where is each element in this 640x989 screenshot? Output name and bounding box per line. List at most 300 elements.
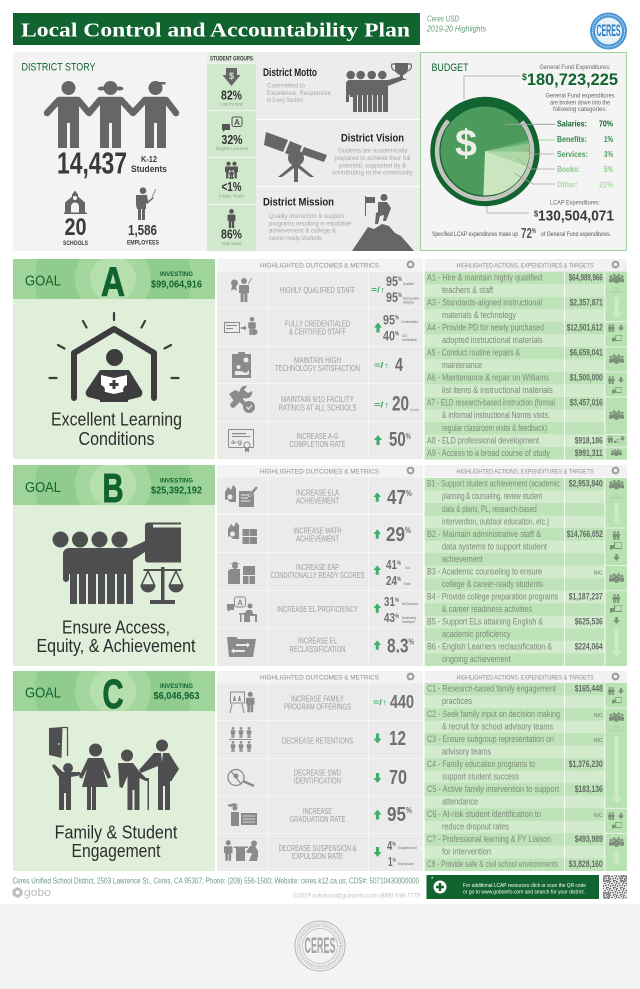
panel: district motto <box>256 52 420 119</box>
students count: 14,437 <box>57 146 127 180</box>
QR code <box>603 875 627 899</box>
target student icons A <box>608 274 625 456</box>
goal A header: A <box>101 259 125 305</box>
metric: EAP conditionally ready scores: % <box>397 561 401 567</box>
metric: fully credentialed staff: % <box>395 332 400 338</box>
mission text <box>269 213 351 242</box>
metric: fully credentialed staff: & CERTIFIED STAFF <box>289 326 346 336</box>
target student icons B <box>609 480 624 656</box>
heading: district mission: District Mission <box>263 196 334 208</box>
title banner: Local Control and Accountability Plan <box>21 20 410 42</box>
donut chart: general fund expenditures <box>430 97 540 206</box>
expenditures C <box>569 684 603 869</box>
leader lines <box>464 76 555 213</box>
panel: goal A outcomes and metrics <box>217 259 423 459</box>
action list C: reduce dropout rates <box>442 822 509 832</box>
budget intro text: General Fund expenditures <box>546 92 615 100</box>
action list C: C7 - Professional learning & FY Liaison <box>427 834 551 844</box>
action list A: adopted instructional materials <box>442 335 543 345</box>
action list C: C1 - Research-based family engagement <box>427 684 556 694</box>
action list A: A5 - Conduct routine repairs & <box>427 348 520 358</box>
metric: EL proficiency: 31 <box>384 594 398 609</box>
target student icons B: Students <box>610 496 624 500</box>
vision text: potential, supported by & <box>339 162 407 169</box>
metric: EL reclassification: INCREASE EL <box>298 636 337 646</box>
metric: suspension and expulsion rate <box>224 838 417 869</box>
metric: math achievement: 29 <box>386 524 408 546</box>
motto text <box>267 82 331 104</box>
motto text: to Every Student <box>267 97 303 104</box>
LCAP expenditures total: LCAP Expenditures: <box>550 200 600 206</box>
metric: EL reclassification: % <box>408 638 414 647</box>
metric: highly qualified staff: % <box>398 293 403 299</box>
metric: EAP conditionally ready scores <box>228 557 411 588</box>
employees count: 1,586 <box>128 222 157 239</box>
metric: suspension and expulsion rate: % <box>393 858 396 864</box>
metric: suspension and expulsion rate: Expulsion <box>398 862 414 866</box>
schools count: SCHOOLS <box>63 241 88 247</box>
metric: family program offerings: 440 <box>390 692 414 712</box>
expenditures C: N/C <box>594 813 603 819</box>
action list C: C2 - Seek family input on decision making <box>427 709 560 719</box>
icon: reader under house roof <box>50 313 178 402</box>
metric: highly qualified staff: HIGHLY QUALIFIED STAFF <box>280 285 355 295</box>
group: foster youth: <1% <box>222 180 242 194</box>
heading: student groups: STUDENT GROUPS <box>210 56 253 62</box>
metric: fully credentialed staff: FULLY CREDENTIALED <box>285 318 350 328</box>
legend: budget categories <box>557 118 613 190</box>
metric: highly qualified staff: Qualified <box>403 282 414 286</box>
bottom seal: CERES <box>304 934 336 958</box>
action list B: B6 - English Learners reclassification & <box>427 642 552 652</box>
target student icons A: Students <box>610 290 624 294</box>
district and year: Ceres USD <box>427 14 459 24</box>
action list C: advisory teams <box>442 746 491 756</box>
employees count: EMPLOYEES <box>127 240 159 246</box>
metric: EL proficiency: Well Developed <box>402 602 418 606</box>
callout: additional LCAP resources: For additional LCAP resources click or scan the QR code <box>463 883 586 889</box>
metric: fully credentialed staff: ECDS <box>402 334 407 338</box>
action list C <box>427 684 560 869</box>
heading: budget: BUDGET <box>432 62 469 74</box>
goal B header: GOAL <box>25 479 61 496</box>
group: english learners: English Learners <box>216 146 249 151</box>
icon: gear <box>613 468 618 473</box>
metric: EAP conditionally ready scores: Math <box>404 582 411 586</box>
motto text: Committed to <box>267 82 305 90</box>
expenditures B: $1,187,237 <box>569 592 603 602</box>
metric: ELA achievement: 47 <box>387 487 409 509</box>
group: english learners: 32% <box>222 133 242 147</box>
metric: graduation rate: GRADUATION RATE <box>290 814 346 824</box>
LCAP expenditures total <box>534 200 614 224</box>
goal C header: INVESTING <box>160 683 193 690</box>
metric: graduation rate: INCREASE <box>303 806 332 816</box>
panel: goal B outcomes and metrics <box>217 465 423 666</box>
group: foster youth <box>219 162 244 198</box>
LCAP share sentence: 72 <box>521 225 538 242</box>
schools count <box>63 214 88 247</box>
action list B: ongoing achievement <box>442 654 511 664</box>
expenditures A: $918,186 <box>575 435 603 445</box>
icon: students with book and scales <box>50 522 184 604</box>
legend: budget categories: Salaries: <box>557 118 587 128</box>
action list A: A8 - ELD professional development <box>427 435 539 445</box>
metric: family program offerings: PROGRAM OFFERINGS <box>284 702 351 712</box>
metric: fully credentialed staff: 95 <box>383 312 399 328</box>
metric: facility ratings: =/↑ <box>374 400 389 410</box>
donut chart: general fund expenditures: $ <box>455 123 477 165</box>
metric: family program offerings: INCREASE FAMILY <box>291 694 344 704</box>
metric: EL proficiency: Moderately <box>402 616 416 620</box>
budget intro text: following categories: <box>553 106 607 113</box>
LCAP expenditures total: 130,504,071 <box>538 208 614 224</box>
metric: math achievement <box>228 522 411 546</box>
icon: teacher <box>136 187 156 220</box>
action list B <box>427 479 560 664</box>
panel: goal C actions and expenditures <box>425 671 627 871</box>
expenditures B: $2,953,840 <box>569 479 603 489</box>
metric: facility ratings: Schools <box>410 408 419 412</box>
icon: gear <box>408 262 413 267</box>
metric: EAP conditionally ready scores: CONDITIONALLY READY SCORES <box>270 570 365 580</box>
metric: decrease SWD identification: DECREASE SWD <box>294 768 341 778</box>
vision text: Students are academically <box>338 148 408 154</box>
heading: district motto: District Motto <box>263 67 317 79</box>
goal B header: B <box>102 465 124 511</box>
action list B: & career readiness activities <box>442 604 532 614</box>
metric: suspension and expulsion rate: 1 <box>388 854 395 869</box>
expenditures C: $493,989 <box>575 834 603 844</box>
goal C title <box>55 822 177 861</box>
LCAP share sentence: % <box>532 228 537 235</box>
action list B: B1 - Support student achievement (academic <box>427 479 560 489</box>
metric: EL reclassification <box>227 636 414 658</box>
panel: district vision <box>256 120 420 186</box>
panel: goal B actions and expenditures <box>425 465 627 666</box>
group: high need <box>221 209 242 246</box>
metric: facility ratings: RATINGS AT ALL SCHOOLS <box>278 402 357 412</box>
expenditures A: $991,311 <box>575 448 603 458</box>
goal B header: INVESTING <box>160 478 193 484</box>
panel: goal B <box>13 407 215 666</box>
icon: family at open door <box>49 727 179 810</box>
goal A title: Conditions <box>78 428 154 449</box>
panel: district story <box>13 52 207 251</box>
action list A: A6 - Maintenance & repair on Williams <box>427 373 549 383</box>
metric: ELA achievement: INCREASE ELA <box>296 488 339 498</box>
expenditures B: $625,536 <box>575 616 603 626</box>
action list A: A4 - Provide PD for newly purchased <box>427 322 544 332</box>
leader lines over chart <box>505 124 555 184</box>
metric: EL proficiency <box>227 594 418 625</box>
metric: A-G completion rate <box>228 429 411 452</box>
metric: EAP conditionally ready scores: INCREASE EAP <box>296 562 339 572</box>
action list B: intervention, outdoor education, etc.) <box>442 516 549 526</box>
metric: EAP conditionally ready scores: ELA <box>405 566 411 570</box>
action list C: C6 - At-risk student identification to <box>427 809 541 819</box>
metric: A-G completion rate: 50 <box>389 429 411 451</box>
action list B: data systems to support student <box>442 541 547 551</box>
metric: graduation rate <box>227 803 412 826</box>
title banner <box>13 13 420 45</box>
icon: climber on mountain with flag <box>352 194 414 251</box>
goal A header: GOAL <box>25 273 61 290</box>
metric: suspension and expulsion rate: Suspension <box>398 846 417 850</box>
metric: graduation rate: 95 <box>387 804 409 826</box>
students count: Students <box>131 164 167 174</box>
expenditures B: N/C <box>594 570 603 576</box>
metric: family program offerings <box>230 692 414 713</box>
action list C: C4 - Family education programs to <box>427 759 535 769</box>
expenditures A: $64,989,966 <box>569 272 603 282</box>
metric: technology satisfaction: MAINTAIN HIGH <box>294 355 341 365</box>
panel: goal C outcomes and metrics <box>217 671 423 871</box>
expenditures A: $6,659,041 <box>570 348 603 358</box>
metric: fully credentialed staff: Certification <box>402 338 417 342</box>
action list A: maintenance <box>442 360 482 370</box>
metric: highly qualified staff: Assigned <box>403 300 414 304</box>
metric: graduation rate: % <box>406 806 412 815</box>
action list C: support student success <box>442 771 519 781</box>
budget intro text: are broken down into the <box>550 99 610 106</box>
icon: people raising trophy <box>342 63 411 112</box>
action list C: C3 - Ensure subgroup representation on <box>427 734 554 744</box>
metric: technology satisfaction: 4 <box>395 355 403 375</box>
expenditures A <box>567 272 603 458</box>
goal A header: INVESTING <box>160 271 193 278</box>
heading: district story: DISTRICT STORY <box>22 62 96 74</box>
action list A: A7 - ELD research-based instruction (formal <box>427 398 555 408</box>
action list A: materials & technology <box>442 310 516 320</box>
metric: A-G completion rate: COMPLETION RATE <box>290 439 346 449</box>
group: english learners <box>216 117 249 151</box>
expenditures A: $3,457,016 <box>570 398 603 408</box>
expenditures C: $3,828,160 <box>569 859 603 869</box>
LCAP share sentence <box>432 225 611 242</box>
group: foster youth: Foster Youth <box>219 194 244 198</box>
metric: highly qualified staff: 95 <box>386 273 402 289</box>
goal B header: $25,392,192 <box>151 485 202 497</box>
heading: district vision: District Vision <box>341 132 404 144</box>
district and year <box>426 14 486 34</box>
metric: decrease SWD identification: 70 <box>389 767 407 789</box>
metric: technology satisfaction: TECHNOLOGY SATISFACTION <box>275 363 360 373</box>
target student icons C: Students <box>610 728 624 732</box>
icon: Ceres district seal <box>590 12 627 50</box>
callout: additional LCAP resources: or go to www.goboinfo.com and search for your district. <box>463 890 585 896</box>
legend: budget categories: Services: <box>557 149 588 159</box>
metric: fully credentialed staff: 40 <box>383 328 399 344</box>
icon: school <box>64 190 87 214</box>
action list C: practices <box>442 696 472 706</box>
icon: gear <box>408 674 413 679</box>
group: low income: 82% <box>221 88 242 102</box>
metric: math achievement: % <box>405 526 411 535</box>
goal B title: Ensure Access, <box>62 617 170 638</box>
expenditures C: N/C <box>594 713 603 719</box>
expenditures A: $12,501,612 <box>567 322 603 332</box>
expenditures A: $2,357,871 <box>570 298 603 308</box>
action list A: regular classroom visits & feedback) <box>442 423 547 433</box>
metric: EL proficiency: % <box>395 598 399 604</box>
goal A title: Excellent Learning <box>51 409 182 430</box>
panel: goal C <box>13 613 215 871</box>
action list A <box>427 272 555 458</box>
callout: additional LCAP resources: * <box>431 877 434 883</box>
goal A title <box>51 409 182 449</box>
action list B: B3 - Academic counseling to ensure <box>427 566 542 576</box>
action list A: teachers & staff <box>442 285 493 295</box>
students count: K-12 <box>141 154 157 164</box>
legend: budget categories: Benefits: <box>557 134 587 144</box>
page background: bottom band <box>0 904 640 989</box>
target student icons B: All <box>615 492 619 496</box>
vision text <box>332 148 414 177</box>
legend: budget categories: Books: <box>557 164 580 174</box>
heading: actions and expenditures: HIGHLIGHTED ACTIONS, EXPENDITURES & TARGETS <box>456 468 594 476</box>
panel: district mission <box>256 187 420 251</box>
metric: EL reclassification: RECLASSIFICATION <box>290 644 346 654</box>
metric: facility ratings: 20 <box>392 392 409 416</box>
heading: actions and expenditures: HIGHLIGHTED ACTIONS, EXPENDITURES & TARGETS <box>456 262 594 269</box>
action list C: C5 - Active family intervention to support <box>427 784 559 794</box>
metric: technology satisfaction <box>232 352 403 378</box>
expenditures B: $14,766,052 <box>567 529 603 539</box>
action list C: attendance <box>442 796 478 806</box>
icon: gear <box>613 674 618 679</box>
metric: suspension and expulsion rate: DECREASE SUSPENSION & <box>278 843 357 853</box>
general fund total: General Fund Expenditures: <box>540 64 611 71</box>
metric: EL proficiency: Developed <box>402 620 415 624</box>
goal B header <box>13 407 215 563</box>
action list C: & recruit for school advisory teams <box>442 721 553 731</box>
vision text: contributing to the community <box>332 170 414 177</box>
expenditures C: $1,376,230 <box>569 759 603 769</box>
expenditures C: N/C <box>594 738 603 744</box>
employees count <box>127 222 159 246</box>
metric: decrease SWD identification: IDENTIFICATION <box>294 776 341 786</box>
metric: family program offerings: =/↑ <box>373 698 387 707</box>
metric: ELA achievement: % <box>406 489 412 498</box>
icon: gear <box>408 468 413 473</box>
icon: three students holding hands <box>47 81 176 148</box>
metric: EAP conditionally ready scores: % <box>397 577 401 583</box>
metric: EL proficiency: A <box>237 598 243 608</box>
goal C title: Family & Student <box>55 822 177 843</box>
metric: decrease SWD identification <box>228 767 407 789</box>
metric: A-G completion rate: a-g <box>231 440 242 446</box>
metric: EL reclassification: 8.3 <box>387 636 415 658</box>
metric: highly qualified staff: Appropriately <box>403 296 419 300</box>
metric: highly qualified staff: % <box>398 277 403 283</box>
gobo logo: gobo <box>24 887 51 899</box>
action list C: C8 - Provide safe & civil school environments <box>427 859 558 869</box>
mission text: achievement & college & <box>269 228 337 235</box>
action list A: A9 - Access to a broad course of study <box>427 448 550 458</box>
legend: budget categories: 5% <box>604 164 613 174</box>
goal C header: $6,046,963 <box>154 690 200 702</box>
target student icons C <box>608 687 624 865</box>
panel: goal A actions and expenditures <box>425 259 627 460</box>
goal A header: $99,064,916 <box>151 278 202 290</box>
action list B: data & plans, PL, research-based <box>442 504 537 514</box>
legend: budget categories: 1% <box>604 134 613 144</box>
district and year: 2019-20 Highlights <box>426 24 486 34</box>
action list B: planning & counseling, review student <box>442 491 542 501</box>
action list A: A1 - Hire & maintain highly qualified <box>427 272 542 282</box>
action list A: A3 - Standards-aligned instructional <box>427 298 542 308</box>
legend: budget categories: Other: <box>557 180 578 190</box>
copyright: ©2019 solutions@goboinfo.com (888) 938-7779 <box>293 892 421 900</box>
metric: fully credentialed staff: % <box>395 316 400 322</box>
icon: gear <box>613 262 618 267</box>
action list A: & informal instructional Norms visits, <box>442 410 550 420</box>
metric: highly qualified staff: =/↑ <box>371 286 385 294</box>
action list A: list items & instructional materials <box>442 385 553 395</box>
legend: budget categories: 70% <box>599 118 613 128</box>
target student icons A: All <box>615 286 619 290</box>
icon: telescope <box>264 132 327 182</box>
metric: decrease retentions: 12 <box>389 728 406 750</box>
goal C title: Engagement <box>72 840 160 861</box>
action list B: achievement <box>442 554 483 564</box>
group: high need: High Need <box>222 241 242 246</box>
LCAP share sentence: Specified LCAP expenditures make up <box>432 231 518 238</box>
metric: EL proficiency: INCREASE EL PROFICIENCY <box>277 604 358 614</box>
target student icons C: All <box>615 725 619 729</box>
metric: fully credentialed staff: Credentialed <box>401 320 418 324</box>
metric: fully credentialed staff <box>224 312 418 344</box>
icon: Ceres district seal: CERES <box>596 21 621 40</box>
goal A header <box>13 201 215 357</box>
motto text: Excellence, Responsive <box>267 90 331 97</box>
goal B title: Equity, & Achievement <box>36 635 196 656</box>
LCAP expenditures total: $ <box>534 210 539 218</box>
heading: outcomes and metrics: HIGHLIGHTED OUTCOMES & METRICS <box>260 262 380 269</box>
legend: budget categories: 21% <box>599 180 613 190</box>
action list B: B2 - Maintain administrative staff & <box>427 529 541 539</box>
expenditures C: $183,136 <box>575 784 603 794</box>
group: low income: Low Income <box>220 102 243 106</box>
schools count: 20 <box>64 214 86 241</box>
panel: budget <box>420 52 626 250</box>
bottom seal <box>295 921 345 971</box>
metric: EAP conditionally ready scores: 41 <box>386 557 400 572</box>
metric: technology satisfaction: =/↑ <box>374 361 389 370</box>
action list B: B5 - Support ELs attaining English & <box>427 616 543 626</box>
metric: facility ratings: MAINTAIN 9/10 FACILITY <box>281 394 354 404</box>
goal C header <box>13 613 215 769</box>
goal B title <box>36 617 196 656</box>
heading: outcomes and metrics: HIGHLIGHTED OUTCOMES & METRICS <box>260 468 380 476</box>
callout: additional LCAP resources <box>426 875 599 899</box>
action list B: B4 - Provide college preparation programs <box>427 592 558 602</box>
expenditures B: $224,064 <box>575 642 603 652</box>
metric: A-G completion rate: % <box>406 432 411 441</box>
goal C header: C <box>102 671 124 717</box>
group: english learners: A <box>234 118 240 127</box>
group: high need: 86% <box>221 228 242 242</box>
group: low income: $ <box>229 71 234 81</box>
heading: actions and expenditures: HIGHLIGHTED ACTIONS, EXPENDITURES & TARGETS <box>456 674 594 682</box>
metric: EAP conditionally ready scores: 24 <box>386 573 400 588</box>
group: low income <box>220 68 243 106</box>
metric: highly qualified staff: 95 <box>386 289 402 305</box>
expenditures C: $165,448 <box>575 684 603 694</box>
action list C: for intervention <box>442 847 491 857</box>
expenditures A: $1,500,000 <box>570 373 603 383</box>
